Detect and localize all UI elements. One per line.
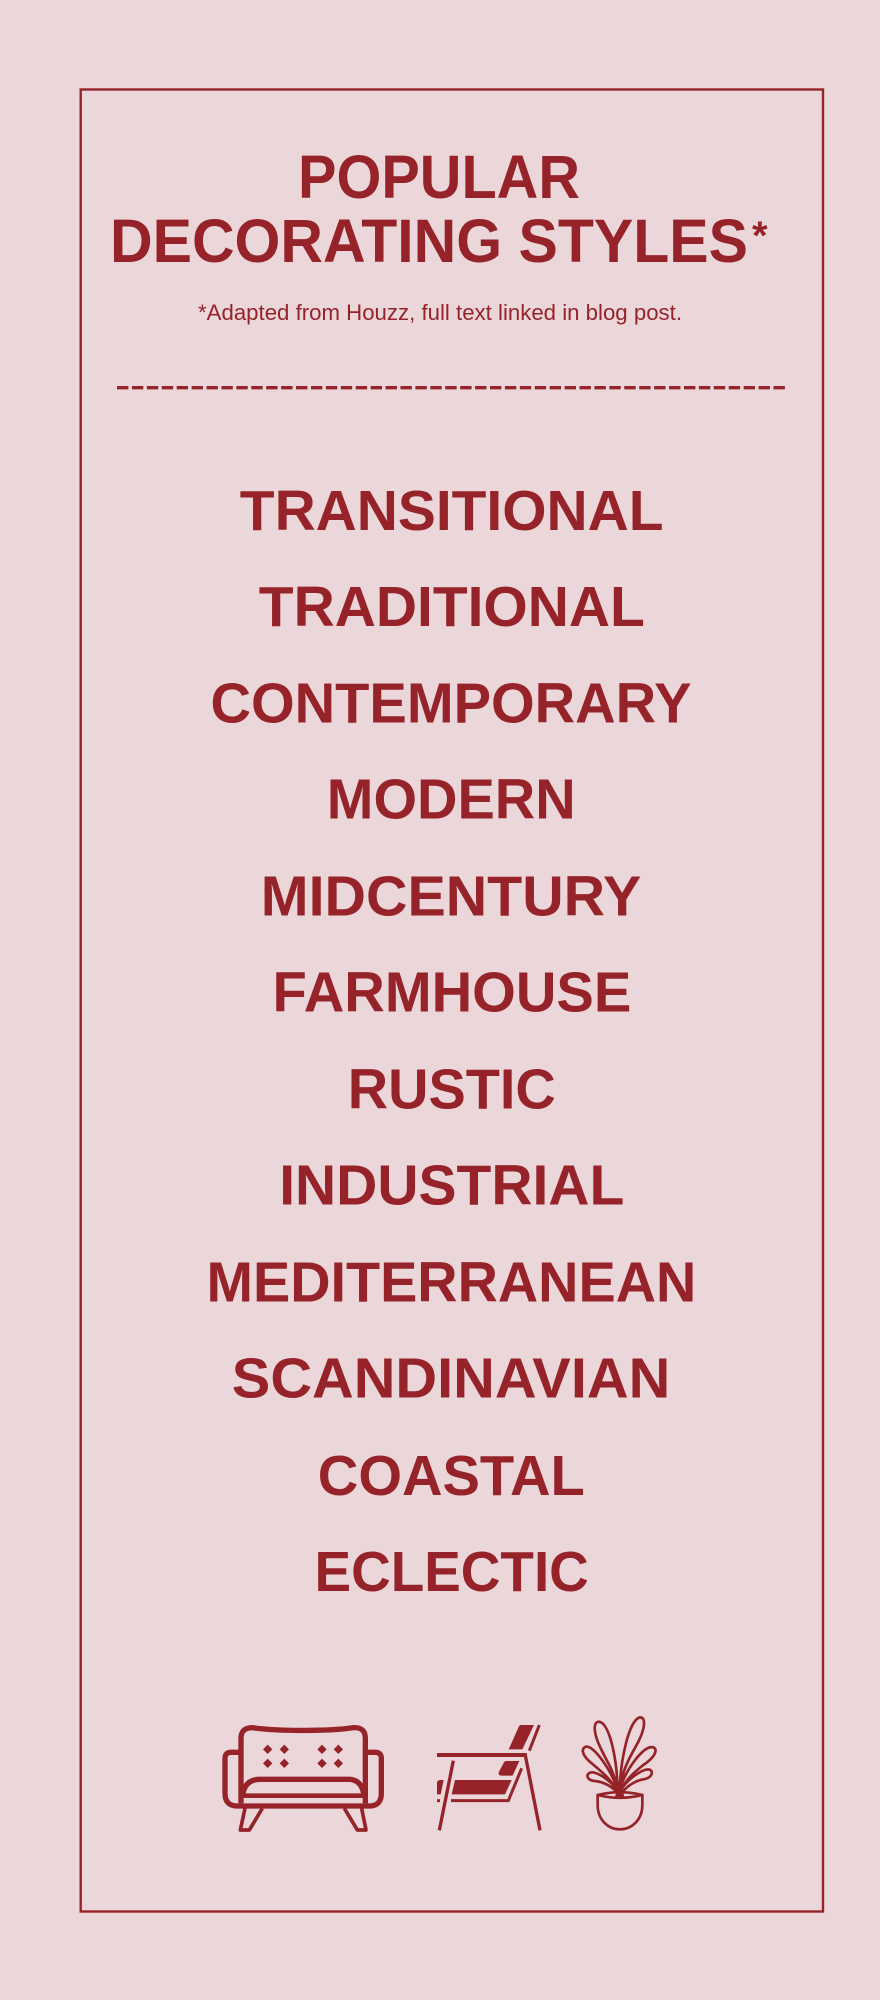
title: POPULAR bbox=[298, 143, 580, 211]
title: * bbox=[752, 214, 768, 258]
icon: sofa bbox=[225, 1728, 381, 1830]
style: scandinavian: SCANDINAVIAN bbox=[232, 1347, 670, 1411]
style: mediterranean: MEDITERRANEAN bbox=[206, 1251, 696, 1315]
style: traditional: TRADITIONAL bbox=[259, 575, 645, 639]
list of decorating styles bbox=[206, 479, 696, 1604]
title: DECORATING STYLES bbox=[110, 207, 748, 275]
subtitle note: *Adapted from Houzz, full text linked in blog post. bbox=[198, 300, 682, 325]
style: farmhouse: FARMHOUSE bbox=[272, 961, 631, 1025]
icon: potted plant bbox=[583, 1717, 656, 1829]
style: rustic: RUSTIC bbox=[348, 1058, 556, 1122]
title bbox=[110, 143, 768, 275]
icon: armchair bbox=[437, 1725, 540, 1830]
style: coastal: COASTAL bbox=[318, 1444, 585, 1508]
style: contemporary: CONTEMPORARY bbox=[210, 672, 692, 736]
style: eclectic: ECLECTIC bbox=[314, 1540, 589, 1604]
style: industrial: INDUSTRIAL bbox=[279, 1154, 624, 1218]
style: midcentury: MIDCENTURY bbox=[261, 865, 641, 929]
icons row bbox=[225, 1717, 656, 1830]
style: transitional: TRANSITIONAL bbox=[240, 479, 664, 543]
style: modern: MODERN bbox=[327, 768, 576, 832]
panel: frame bbox=[81, 90, 823, 1912]
